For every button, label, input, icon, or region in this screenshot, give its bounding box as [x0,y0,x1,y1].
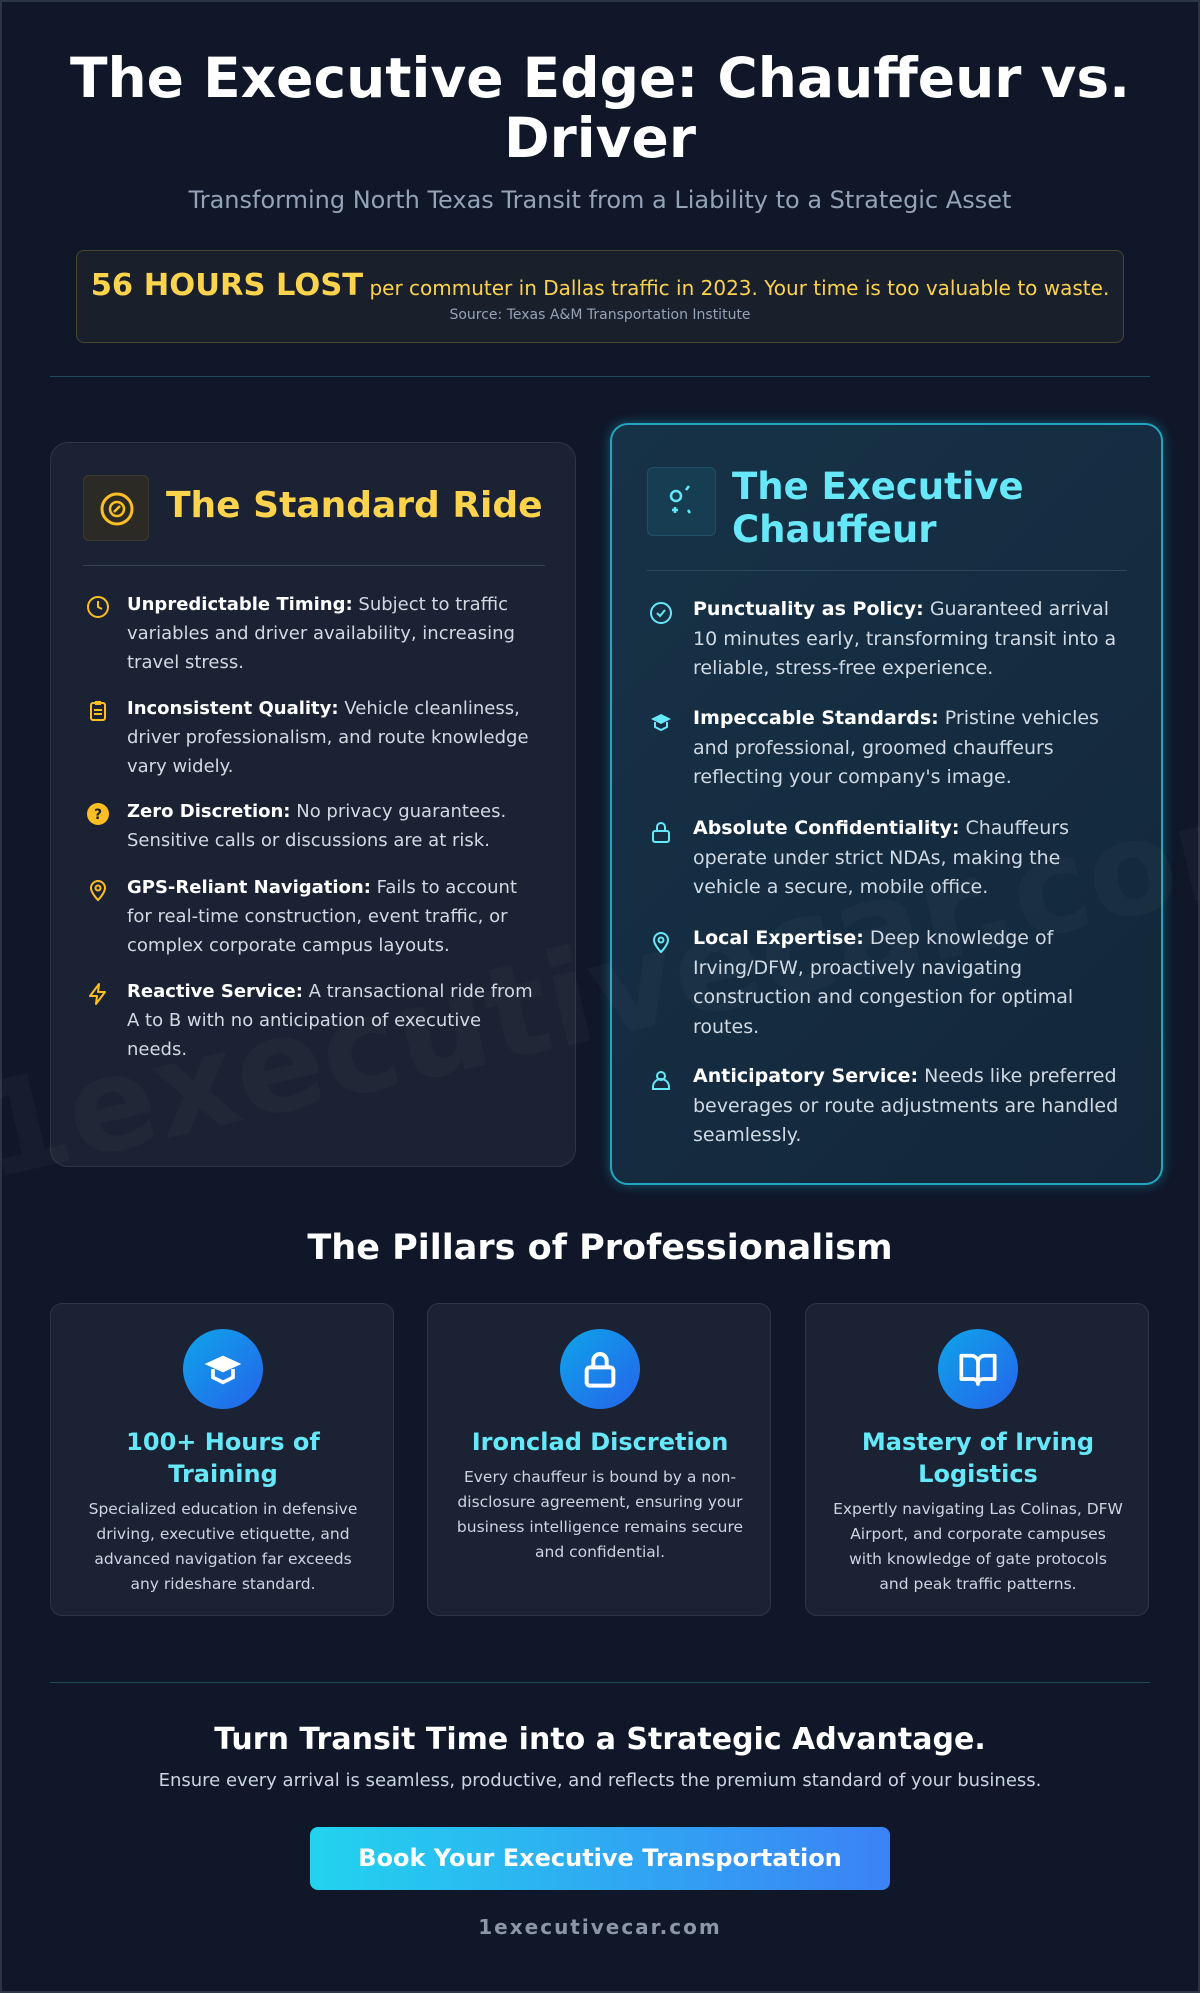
cta button [310,1827,890,1890]
icon: executive [647,467,716,536]
pillar: logistics: Expertly navigating Las Colinas, DFW Airport, and corporate campuses with knowledge of gate protocols and peak traffic patterns. [833,1500,1123,1593]
pillar: logistics [805,1303,1149,1616]
item: quality: Inconsistent Quality: Vehicle cleanliness, driver professionalism, and route knowledge vary widely. [127,698,529,777]
pillar: discretion [427,1303,771,1616]
icon: clipboard [90,701,106,721]
stat callout [76,250,1124,343]
cta text: Ensure every arrival is seamless, productive, and reflects the premium standard of your business. [159,1770,1041,1791]
heading: standard ride: The Standard Ride [166,485,543,526]
pillar: discretion: Ironclad Discretion [472,1428,728,1456]
pillar: discretion: Every chauffeur is bound by a non-disclosure agreement, ensuring your business intelligence remains secure and confidential. [457,1468,743,1561]
item: standards: Impeccable Standards: Pristine vehicles and professional, groomed chauffeurs reflecting your company's image. [693,707,1099,788]
heading: executive: The Executive [732,465,1024,508]
icon: graduation [183,1329,263,1409]
icon: pin [653,932,669,954]
heading: executive [732,465,1024,551]
cta heading: Turn Transit Time into a Strategic Advantage. [214,1722,986,1757]
stat callout: 56 HOURS LOST per commuter in Dallas traffic in 2023. Your time is too valuable to waste. [91,268,1109,303]
pillar: logistics: Logistics [918,1460,1038,1488]
icon: lock [560,1329,640,1409]
icon: book [938,1329,1018,1409]
panel: executive chauffeur [610,423,1163,1185]
pillar: training: 100+ Hours of [126,1428,320,1456]
icon: standard [83,475,149,541]
heading: pillars: The Pillars of Professionalism [307,1228,893,1268]
cta button: Book Your Executive Transportation [358,1844,842,1872]
icon: bolt [89,983,106,1005]
item: reactive: Reactive Service: A transactional ride from A to B with no anticipation of executive needs. [127,981,533,1060]
icon: pin [90,880,106,902]
item: timing: Unpredictable Timing: Subject to traffic variables and driver availability, increasing travel stress. [127,594,515,673]
icon: question [87,803,109,825]
item: anticipatory: Anticipatory Service: Needs like preferred beverages or route adjustments are handled seamlessly. [693,1065,1118,1146]
icon: cap [651,714,671,732]
panel: standard ride [50,442,576,1167]
subtitle: Transforming North Texas Transit from a Liability to a Strategic Asset [189,186,1011,214]
pillar: training: Training [168,1460,278,1488]
icon: check [650,602,672,624]
item: discretion: Zero Discretion: No privacy guarantees. Sensitive calls or discussions are at risk. [127,801,506,851]
item: punctuality: Punctuality as Policy: Guaranteed arrival 10 minutes early, transforming transit into a reliable, stress-free experience. [693,598,1116,679]
stat callout: Source: Texas A&M Transportation Institute [449,307,751,323]
heading: executive: Chauffeur [732,508,936,551]
icon: lock [652,822,670,843]
pillar: logistics: Mastery of Irving [862,1428,1094,1456]
item: local: Local Expertise: Deep knowledge of Irving/DFW, proactively navigating construction and congestion for optimal routes. [693,927,1073,1038]
title: The Executive Edge: Chauffeur vs. [70,46,1130,110]
title: Driver [504,106,696,170]
title [70,46,1130,170]
pillar: training: Specialized education in defensive driving, executive etiquette, and advanced navigation far exceeds any rideshare standard. [89,1500,357,1593]
pillar: training [50,1303,394,1616]
footer url: 1executivecar.com [478,1915,722,1939]
icon: user [652,1071,670,1090]
item: confidentiality: Absolute Confidentiality: Chauffeurs operate under strict NDAs, making the vehicle a secure, mobile office. [693,817,1069,898]
icon: clock [87,596,109,618]
item: gps: GPS-Reliant Navigation: Fails to account for real-time construction, event traffic, or complex corporate campus layouts. [127,877,517,956]
icon: question: ? [94,807,102,823]
